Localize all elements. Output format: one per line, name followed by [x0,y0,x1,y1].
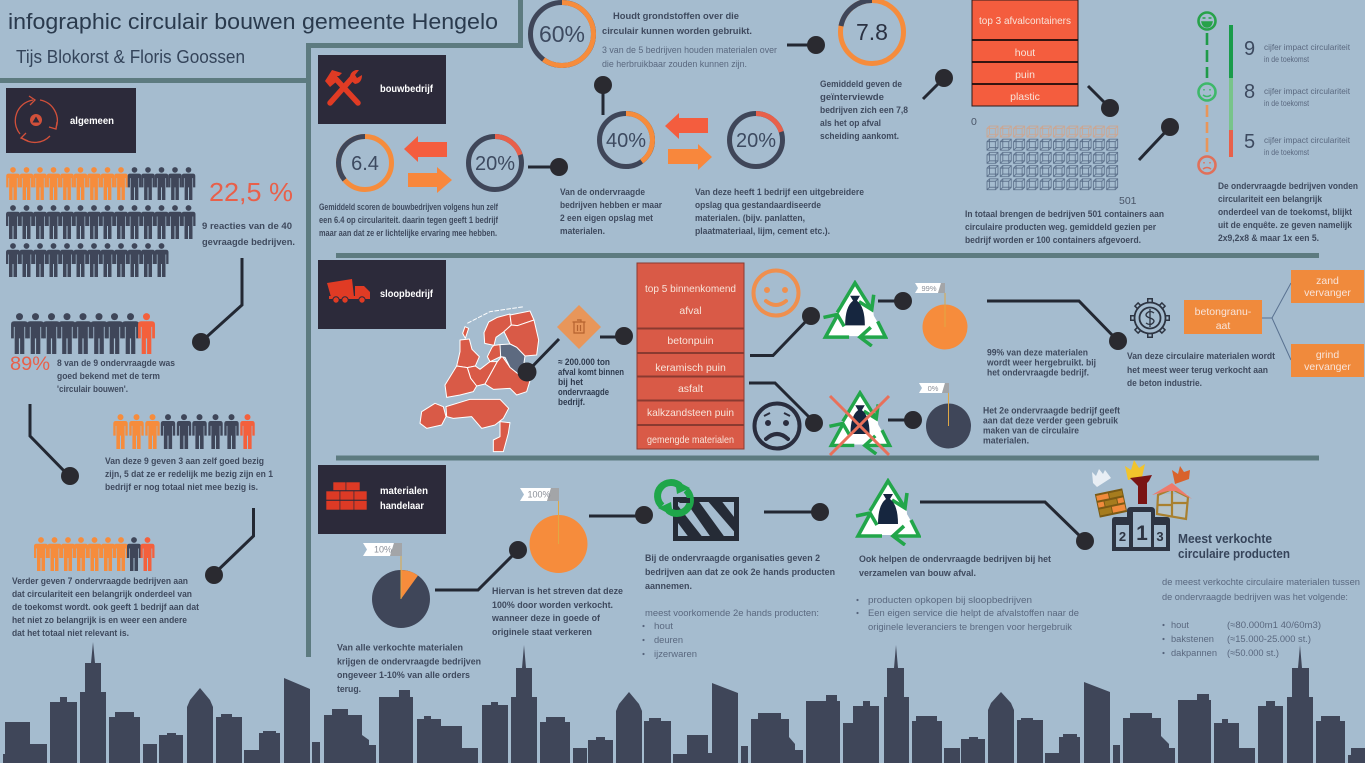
chart: pie 10%: 10% [374,544,392,554]
callout: positief [750,307,820,356]
text: eigen opslag: 2 een eigen opslag met [560,213,654,224]
heading: sloopbedrijf [318,260,446,329]
text: bekendheid: 8 van de 9 ondervraagde was [57,358,175,369]
text: toekomst [12,576,200,639]
text: afvalscheiding: Gemiddeld geven de [820,79,902,90]
stat: 22,5 %: 22,5 % [209,177,293,207]
icon: podium with products: 3 [1156,529,1164,544]
box: grind vervanger: grind [1316,349,1339,361]
heading: sloopbedrijf: sloopbedrijf [380,289,434,300]
callout: 99% [878,292,912,310]
callout: tonnage [600,327,633,345]
chart: pie 99%: 99% [921,284,937,293]
donut: 20% [468,136,522,190]
text: 501 containers: circulaire producten weg. gemiddeld gezien per [965,222,1156,233]
panel: sloopbedrijf [318,260,1364,455]
text: verzamelen: Een eigen service die helpt de afvalstoffen naar de [868,608,1079,619]
table: top 5 binnenkomend afval: betonpuin [667,335,714,347]
table: top 5 binnenkomend afval: gemengde materialen [647,434,734,446]
stat: cijfers impact: cijfer impact circulariteit [1264,135,1351,145]
text: toekomst: het niet zo belangrijk is en weer een andere [12,615,187,626]
text: streven 100%: 100% door worden verkocht. [492,600,613,611]
text: grondstoffen: 3 van de 5 bedrijven houden materialen over [602,45,778,56]
text: streven 100%: wanneer deze in goede of [491,613,601,624]
text: beton industrie: Van deze circulaire materialen wordt [1127,351,1276,362]
text: score: een 6.4 op circulariteit. daarin tegen geeft 1 bedrijf [319,215,499,226]
arrow: rechts [408,167,452,193]
pictogram: 40 bedrijven [6,167,196,277]
text: toekomst: Verder geven 7 ondervraagde bedrijven aan [12,576,188,587]
text: meest verkochte list: (≈80.000m1 40/60m3) [1227,620,1321,631]
pictogram: 7-1-1 [34,537,154,571]
text: toekomst enquete [1218,181,1358,244]
text: streven 100% [491,586,623,638]
donut: 7.8: 7.8 [856,19,888,45]
text: meest verkochte list: de meest verkochte circulaire materialen tussen [1162,577,1360,588]
text: toekomst: dat het totaal niet relevant is. [12,628,129,639]
callout: afvalcontainers [923,69,953,99]
callout: Overijssel [518,339,559,382]
heading: bouwbedrijf [318,55,446,124]
icon: afval diamond [557,305,601,349]
icon: recycle bag [856,481,919,545]
text: uitgebreide opslag: plaatmateriaal, lijm, cement etc.). [695,226,830,237]
text: toekomst: dat circulariteit een belangrijk onderdeel van [12,589,192,600]
heading: materialen handelaar: handelaar [380,501,424,512]
text: 99%: wordt weer hergebruikt. bij [986,358,1096,368]
text: 1-10%: krijgen de ondervraagde bedrijven [337,656,481,668]
box: betongranulaat: aat [1216,320,1230,332]
text: verzamelen [856,554,1079,633]
text: uitgebreide opslag [695,187,864,237]
text: beton industrie: de beton industrie. [1127,378,1202,389]
text: 99% [986,348,1096,378]
chart: pie 0%: 0% [928,384,939,393]
text: toekomst: de toekomst wordt. ook geeft 1 bedrijf aan dat [12,602,200,613]
stat: cijfers impact [1244,38,1351,157]
icon: sad [754,404,800,448]
text: bekendheid: 'circulair bouwen'. [57,384,128,395]
text: grondstoffen: Houdt grondstoffen over die [613,11,739,22]
table: top 5 binnenkomend afval: kalkzandsteen puin [647,407,734,419]
text: 2e hands [642,553,835,660]
text: 2e hands: aannemen. [645,581,692,592]
table: top 5 binnenkomend afval: keramisch puin [655,362,726,374]
callout 2 [30,404,79,485]
pictogram: 8 van 9 [11,313,155,354]
heading: materialen handelaar [318,465,446,534]
text: 99%: 99% van deze materialen [987,348,1088,358]
text: 9 reacties: 9 reacties van de 40 [202,221,292,232]
text: 1-10%: ongeveer 1-10% van alle orders [337,670,470,681]
text: 0%: materialen. [983,436,1029,446]
text: 200.000 ton: ≈ 200.000 ton [558,357,610,368]
text: 200.000 ton: bij het [558,377,584,388]
donut: 20% uitgebreid: 20% [736,130,776,152]
text: score: maar aan dat ze er lichtelijke ervaring mee hebben. [319,228,497,239]
callout: impact [1139,118,1179,160]
text: 2e hands: deuren [654,635,683,646]
connector [1262,283,1291,360]
panel: bouwbedrijf [318,0,1358,246]
text: afvalscheiding: als het op afval [820,118,881,129]
text: beton industrie: het meest weer terug verkocht aan [1127,365,1268,376]
table: top 5 binnenkomend afval: afval [679,305,702,317]
callout: 7.8 [787,36,825,54]
text: 1-10%: terug. [337,684,361,695]
text: bezig [105,456,274,493]
callout: hergebruik [987,301,1127,350]
text: afvalscheiding: bedrijven zich een 7,8 [820,105,908,116]
text: 1-10%: Van alle verkochte materialen [337,642,463,654]
heading: materialen handelaar: materialen [380,486,428,497]
text: 2e hands: bedrijven aan dat ze ook 2e hands producten [645,567,835,578]
text: score [319,202,499,239]
chart: 501 containers: 501 [1119,195,1137,207]
text: 200.000 ton [558,357,624,408]
text: toekomst enquete: 2x9,2x8 & maar 1x een 5. [1218,233,1319,244]
box: betongranulaat [1184,300,1262,334]
heading: meest verkochte: circulaire producten [1178,547,1290,561]
icon: gear dollar [1130,298,1170,338]
text: grondstoffen: circulair kunnen worden gebruikt. [602,26,752,37]
text: eigen opslag [560,187,662,237]
stat: cijfers impact: in de toekomst [1264,98,1310,108]
text: 200.000 ton: ondervraagde [558,387,609,398]
heading: meest verkochte: Meest verkochte [1178,532,1272,546]
icon: smile [754,270,798,316]
table: top 5 binnenkomend afval: asfalt [678,383,703,395]
table: top 5 binnenkomend afval [637,263,744,449]
text: meest verkochte list: bakstenen [1171,634,1214,645]
subtitle: authors: Tijs Blokorst & Floris Goossen [16,47,245,67]
callout: afval verzamelen [764,503,829,521]
text: eigen opslag: Van de ondervraagde [560,187,645,198]
box: zand vervanger [1291,270,1364,303]
map: Nederland [420,307,539,452]
icon: podium with products [1092,460,1192,551]
title: infographic circulair bouwen gemeente Hengelo [8,9,498,34]
donut: 20% uitgebreid [730,114,782,166]
table: top 3 afvalcontainers: top 3 afvalcontainers [979,15,1071,27]
text: meest verkochte list: hout [1171,620,1189,631]
text: 200.000 ton: afval komt binnen [558,367,624,378]
text: bekendheid [57,358,175,395]
stat: cijfers impact: 5 [1244,131,1255,153]
donut: 20%: 20% [475,153,515,175]
stat: cijfers impact: 8 [1244,81,1255,103]
icon: recycle crossed out [829,393,890,455]
callout: 10% [435,541,527,590]
text: grondstoffen [602,11,778,70]
text: verzamelen: verzamelen van bouw afval. [859,568,976,579]
text: uitgebreide opslag: materialen. (bijv. panlatten, [695,213,805,224]
text: streven 100%: Hiervan is het streven dat deze [492,586,623,597]
skyline [3,642,1365,763]
callout: producten [920,502,1094,550]
text: afvalscheiding: geïnterviewde [820,92,884,103]
donut: 6.4 [338,136,392,190]
text: 0% [983,406,1121,446]
stat: cijfers impact: cijfer impact circulariteit [1264,42,1351,52]
text: toekomst enquete: onderdeel van de toekomst, blijkt [1218,207,1353,218]
icon: podium with products: 1 [1136,522,1148,545]
chart: pie 100%: 100% [527,490,551,500]
arrow: links [404,136,447,162]
text: 501 containers [965,209,1164,246]
panel: materialen handelaar [318,460,1360,695]
icon: hatch box with recycle [658,480,738,539]
heading: algemeen: algemeen [70,116,114,127]
chart: 501 containers [971,116,1137,207]
text: bekendheid: goed bekend met de term [57,371,160,382]
callout: negatief [749,383,823,432]
chart: pie 10% [363,543,430,628]
table: top 3 afvalcontainers [972,0,1078,106]
callout: 0% [888,411,922,429]
chart: 501 containers: 0 [971,116,977,128]
icon: podium with products: 2 [1119,529,1126,544]
table: top 5 binnenkomend afval: top 5 binnenkomend [645,283,736,295]
text: beton industrie [1127,351,1276,389]
table: top 3 afvalcontainers: hout [1015,47,1035,59]
text: 2e hands: Bij de ondervraagde organisaties geven 2 [645,553,820,564]
text: meest verkochte list: de ondervraagde bedrijven was het volgende: [1162,592,1348,603]
box: zand vervanger: vervanger [1304,287,1351,299]
donut: 6.4: 6.4 [351,153,379,175]
stat: cijfers impact: in de toekomst [1264,147,1310,157]
text: 2e hands: meest voorkomende 2e hands producten: [645,608,819,619]
text: 2e hands: hout [654,621,673,632]
chart: pie 99% [915,283,968,350]
text: 9 reacties [202,221,295,248]
callout: 2e hands [589,506,653,524]
text: 501 containers: bedrijf worden er 100 containers afgevoerd. [965,235,1141,246]
box: zand vervanger: zand [1316,275,1339,287]
text: 200.000 ton: bedrijf. [558,397,585,408]
callout 1 [192,258,242,351]
text: meest verkochte list [1162,577,1360,659]
text: 1-10% [337,642,481,695]
bar: impact scale [1229,25,1233,157]
callout 3 [205,508,254,584]
box: betongranulaat: betongranu- [1195,306,1252,318]
text: score: Gemiddeld scoren de bouwbedrijven volgens hun zelf [319,202,499,213]
text: bezig: bedrijf er nog totaal niet mee bezig is. [105,482,258,493]
chart: pie 0% [919,383,971,448]
text: afvalscheiding: scheiding aankomt. [820,131,899,142]
arrow: rechts 2 [668,144,712,170]
panel: algemeen [6,88,295,639]
text: grondstoffen: die herbruikbaar zouden kunnen zijn. [602,59,747,70]
donut: 7.8 [840,0,904,64]
text: verzamelen: originele leveranciers te brengen voor hergebruik [868,622,1072,633]
callout: 20% [528,158,568,176]
donut: 60%: 60% [539,21,585,47]
text: 0%: aan dat deze verder geen gebruik [983,416,1119,426]
heading: bouwbedrijf: bouwbedrijf [380,84,434,95]
text: 99%: het ondervraagde bedrijf. [987,368,1089,378]
arrow: links 2 [665,113,708,139]
text: meest verkochte list: dakpannen [1171,648,1217,659]
heading: meest verkochte [1178,532,1290,561]
icon: recycle triangle [823,283,886,346]
callout: opslag [594,76,612,115]
heading: algemeen [6,88,136,153]
text: verzamelen: Ook helpen de ondervraagde bedrijven bij het [859,554,1052,565]
scale: smileys [1198,12,1216,174]
box: grind vervanger [1291,344,1364,377]
text: uitgebreide opslag: opslag qua gestandaardiseerde [695,200,821,211]
table: top 3 afvalcontainers: puin [1015,69,1035,81]
text: eigen opslag: bedrijven hebben er maar [560,200,662,211]
chart: pie 100% [520,488,588,573]
box: grind vervanger: vervanger [1304,361,1351,373]
text: 2e hands: ijzerwaren [654,649,697,660]
callout: containers [1088,86,1119,117]
text: streven 100%: originele staat verkeren [492,627,592,638]
stat: cijfers impact: in de toekomst [1264,54,1310,64]
donut: 40% [600,114,652,166]
stat: cijfers impact: 9 [1244,38,1255,60]
text: toekomst enquete: circulariteit een belangrijk [1218,194,1323,205]
text: 0%: maken van de circulaire [983,426,1079,436]
table: top 3 afvalcontainers: plastic [1010,91,1040,103]
text: uitgebreide opslag: Van deze heeft 1 bedrijf een uitgebreidere [695,187,864,198]
text: bezig: zijn, 5 dat ze er redelijk me bezig zijn en 1 [105,469,274,480]
pictogram: 3-5-1 [113,414,255,449]
stat: 89%: 89% [10,354,50,375]
text: 501 containers: In totaal brengen de bedrijven 501 containers aan [965,209,1164,220]
text: meest verkochte list: (≈50.000 st.) [1227,648,1279,659]
text: meest verkochte list: (≈15.000-25.000 st.) [1227,634,1311,645]
text: toekomst enquete: uit de enquête. ze geven namelijk [1218,220,1353,231]
donut: 40%: 40% [606,130,646,152]
stat: cijfers impact: cijfer impact circulariteit [1264,86,1351,96]
text: eigen opslag: materialen. [560,226,605,237]
text: 9 reacties: gevraagde bedrijven. [202,237,295,248]
donut: 60% [530,2,594,66]
text: afvalscheiding [820,79,908,142]
text: bezig: Van deze 9 geven 3 aan zelf goed bezig [105,456,264,467]
text: verzamelen: producten opkopen bij sloopbedrijven [868,595,1032,606]
text: 0%: Het 2e ondervraagde bedrijf geeft [983,406,1121,416]
